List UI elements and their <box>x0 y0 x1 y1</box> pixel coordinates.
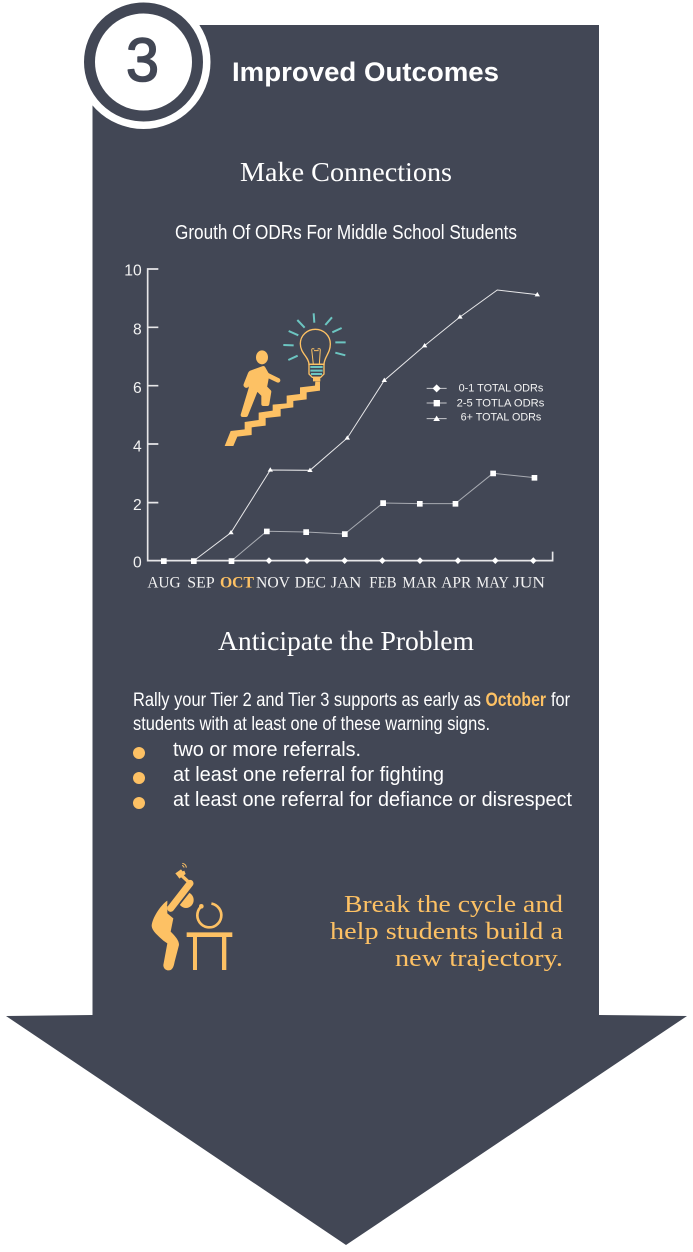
x axis labels: JAN <box>331 575 361 592</box>
y axis labels <box>124 263 142 572</box>
x axis labels: AUG <box>147 575 181 592</box>
bullet list: two or more referrals. <box>173 739 361 761</box>
body <box>152 901 179 970</box>
callout: break the cycle <box>330 892 563 972</box>
x axis labels <box>147 575 545 592</box>
line chart <box>124 263 553 592</box>
callout: break the cycle: new trajectory. <box>395 946 563 972</box>
heading: anticipate the problem: Anticipate the Problem <box>218 626 474 656</box>
x axis labels: JUN <box>513 575 545 592</box>
y axis labels: 6 <box>133 380 142 397</box>
number badge <box>76 0 210 129</box>
x axis labels: NOV <box>256 575 290 592</box>
legend <box>427 383 545 424</box>
series: 6+ total ODRs <box>194 290 540 561</box>
legend: 6+ TOTAL ODRs <box>461 412 542 424</box>
legend: 0-1 TOTAL ODRs <box>459 383 544 395</box>
y axis labels: 10 <box>124 263 142 280</box>
x axis labels: SEP <box>187 575 215 592</box>
y axis labels: 0 <box>133 555 142 572</box>
text block: warning signs intro: Rally your Tier 2 and Tier 3 supports as early as <box>133 690 481 711</box>
bullet list <box>133 739 572 811</box>
x axis labels: APR <box>441 575 472 592</box>
icon: person hammering at table <box>152 863 232 970</box>
bulb rays <box>283 313 346 374</box>
x axis labels: DEC <box>295 575 326 592</box>
y axis labels: 2 <box>133 497 142 514</box>
text block: warning signs intro: October <box>486 690 546 711</box>
x axis labels: OCT <box>220 575 254 592</box>
series: 0-1 total ODRs <box>266 557 537 564</box>
light bulb <box>300 329 330 381</box>
axes <box>148 269 553 561</box>
number badge: 3 <box>126 26 159 94</box>
title: Improved Outcomes <box>232 57 499 87</box>
heading: make connections: Make Connections <box>240 157 452 187</box>
x axis labels: FEB <box>369 575 397 592</box>
legend: 2-5 TOTLA ODRs <box>457 397 545 409</box>
chart title: Grouth Of ODRs For Middle School Students <box>175 222 517 244</box>
series: 2-5 total ODRs <box>161 471 537 564</box>
x axis labels: MAY <box>476 575 509 592</box>
x axis labels: MAR <box>402 575 438 592</box>
callout: break the cycle: help students build a <box>330 919 563 945</box>
y axis labels: 4 <box>133 438 142 455</box>
person <box>243 368 278 415</box>
callout: break the cycle: Break the cycle and <box>344 892 563 918</box>
bullet list: at least one referral for fighting <box>173 764 444 786</box>
icon: person climbing stairs to light bulb <box>225 313 346 446</box>
text block: warning signs intro <box>133 690 571 735</box>
text block: warning signs intro: students with at least one of these warning signs. <box>133 714 490 735</box>
stairs <box>225 382 320 446</box>
text block: warning signs intro: for <box>551 690 571 711</box>
bullet list: at least one referral for defiance or disrespect <box>173 789 572 811</box>
y axis labels: 8 <box>133 321 142 338</box>
